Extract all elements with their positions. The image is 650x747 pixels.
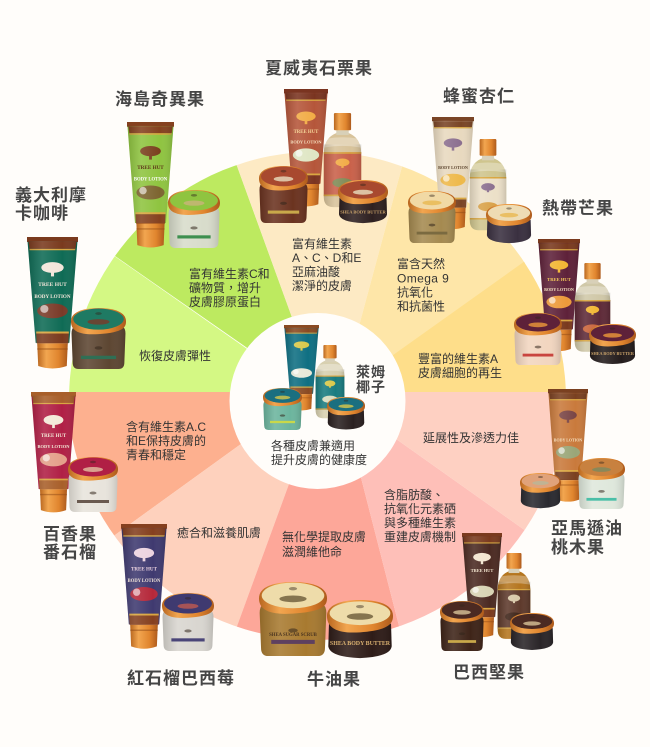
- text: Brazil nut benefits: 含脂肪酸、: [384, 487, 444, 502]
- text: Brazil nut benefits: 與多種維生素: [384, 516, 456, 530]
- product group: lime coconut: [263, 325, 365, 430]
- tube: body lotion: BODY LOTION: [134, 177, 168, 182]
- text: guava benefits: 和E保持皮膚的: [126, 433, 206, 448]
- tube: body lotion: [127, 122, 174, 247]
- jar: sugar scrub: [162, 593, 214, 651]
- text: Brazil nut benefits: 重建皮膚機制: [384, 529, 456, 544]
- product group: Brazil nut: [440, 533, 554, 651]
- tube: body lotion: BODY LOTION: [554, 437, 582, 442]
- heading: 萊姆椰子: 萊姆: [356, 364, 386, 380]
- tube: body lotion: BODY LOTION: [438, 165, 468, 170]
- tube: firming body lotion: TREE HUT: [38, 282, 67, 288]
- heading: 義大利摩卡咖啡: 義大利摩: [15, 185, 87, 205]
- text: Brazil nut benefits: 抗氧化元素硒: [384, 501, 456, 516]
- jar: sugar scrub: [168, 190, 220, 248]
- tube: body lotion: TREE HUT: [41, 434, 67, 439]
- text: kiwi benefits: 礦物質，增升: [189, 280, 261, 295]
- tube: body lotion: [284, 89, 328, 206]
- tube: body lotion: [538, 239, 580, 351]
- bottle: body wash: [324, 113, 361, 207]
- jar: sugar scrub: [440, 601, 484, 651]
- text: shea benefits: 滋潤維他命: [282, 544, 342, 559]
- jar: body butter: [510, 613, 554, 650]
- jar: sugar scrub: [578, 458, 625, 509]
- jar: sugar scrub: [514, 313, 562, 365]
- tube: body lotion: [121, 524, 167, 649]
- text: almond benefits: 富含天然: [397, 256, 445, 271]
- tube: body lotion: TREE HUT: [294, 130, 319, 135]
- tube: body lotion: TREE HUT: [131, 567, 158, 573]
- jar: sugar scrub: [408, 191, 456, 243]
- heading: 夏威夷石栗果: 夏威夷石栗果: [265, 58, 373, 78]
- product group: pomegranate: [121, 524, 214, 651]
- jar: body butter: SHEA BODY BUTTER: [330, 641, 391, 647]
- heading: 義大利摩卡咖啡: 卡咖啡: [15, 204, 69, 223]
- heading: 蜂蜜杏仁: 蜂蜜杏仁: [443, 86, 515, 106]
- center circle: [230, 313, 406, 489]
- bottle: body wash: [316, 345, 344, 418]
- text: kukui benefits: 亞麻油酸: [292, 264, 340, 279]
- jar: sugar scrub: [259, 166, 308, 223]
- jar: body butter: [520, 473, 561, 508]
- jar: sugar scrub: SHEA SUGAR SCRUB: [269, 633, 318, 638]
- heading: 亞馬遜油桃木果: 桃木果: [551, 538, 605, 557]
- tube: body lotion: BODY LOTION: [128, 579, 161, 584]
- tube: body lotion: [284, 325, 319, 410]
- text: pomegranate benefits: 癒合和滋養肌膚: [177, 525, 261, 540]
- product group: tropical mango: [514, 239, 636, 365]
- tube: body lotion: TREE HUT: [137, 165, 164, 171]
- heading: 百香果番石榴: 番石榴: [43, 543, 97, 562]
- bottle: body wash: [470, 139, 506, 230]
- tube: body lotion: BODY LOTION: [38, 444, 70, 449]
- jar: body butter: [327, 397, 365, 430]
- jar: sugar scrub: [71, 308, 126, 369]
- text: almond benefits: 和抗菌性: [397, 298, 445, 314]
- jar: sugar scrub: [68, 457, 118, 512]
- chart: benefits wheel: [69, 152, 566, 640]
- heading: 熱帶芒果: 熱帶芒果: [542, 199, 614, 218]
- jar: sugar scrub: [263, 388, 302, 430]
- product group: Hawaiian kukui: [259, 89, 388, 223]
- product group: island kiwi: [127, 122, 220, 248]
- text: guava benefits: 含有維生素A.C: [126, 419, 206, 434]
- tube: firming body lotion: BODY LOTION: [34, 295, 71, 300]
- tube: body lotion: TREE HUT: [547, 277, 571, 282]
- product group: shea butter: [259, 582, 393, 658]
- heading: 牛油果: 牛油果: [307, 670, 361, 689]
- bottle: body wash: [575, 263, 610, 352]
- heading: 紅石榴巴西莓: 紅石榴巴西莓: [127, 668, 235, 688]
- text: mango benefits: 豐富的維生素A: [418, 351, 498, 366]
- heading: 海島奇異果: 海島奇異果: [115, 90, 205, 109]
- tube: firming body lotion: [27, 237, 78, 368]
- heading: 百香果番石榴: 百香果: [43, 525, 97, 544]
- text: kukui benefits: 潔淨的皮膚: [292, 278, 352, 293]
- text: guava benefits: 青春和穩定: [126, 447, 186, 462]
- tube: body lotion: BODY LOTION: [290, 140, 322, 145]
- product group: Amazon andiroba: [520, 389, 625, 509]
- text: andiroba benefits: 延展性及滲透力佳: [423, 431, 519, 445]
- heading: 亞馬遜油桃木果: 亞馬遜油: [551, 519, 623, 538]
- jar: body butter: [486, 204, 532, 243]
- text: shea benefits: 無化學提取皮膚: [282, 529, 366, 544]
- product group: Italian coffee: [27, 237, 126, 369]
- text: lime coconut benefits: 各種皮膚兼適用: [271, 438, 355, 453]
- text: kukui benefits: 富有維生素: [292, 236, 352, 251]
- text: 恢復皮膚彈性: 恢復皮膚彈性: [139, 348, 211, 363]
- text: kukui benefits: A、C、D和E: [292, 251, 361, 265]
- heading: 巴西堅果: 巴西堅果: [453, 663, 525, 682]
- bottle: body wash: [498, 553, 530, 639]
- text: mango benefits: 皮膚細胞的再生: [418, 365, 502, 380]
- text: almond benefits: Omega 9: [397, 272, 449, 286]
- tube: body lotion: BODY LOTION: [544, 287, 574, 292]
- text: almond benefits: 抗氧化: [397, 284, 433, 300]
- jar: body butter: SHEA BODY BUTTER: [591, 351, 635, 356]
- text: kiwi benefits: 皮膚膠原蛋白: [189, 294, 261, 309]
- tube: body lotion: TREE HUT: [471, 568, 493, 573]
- product group: passion fruit guava: [31, 392, 118, 512]
- tube: body lotion: [31, 392, 76, 512]
- text: lime coconut benefits: 提升皮膚的健康度: [271, 452, 367, 467]
- text: kiwi benefits: 富有維生素C和: [189, 266, 270, 281]
- jar: body butter: SHEA BODY BUTTER: [340, 209, 387, 214]
- product group: honey almond: [408, 117, 532, 243]
- heading: 萊姆椰子: 椰子: [356, 379, 386, 395]
